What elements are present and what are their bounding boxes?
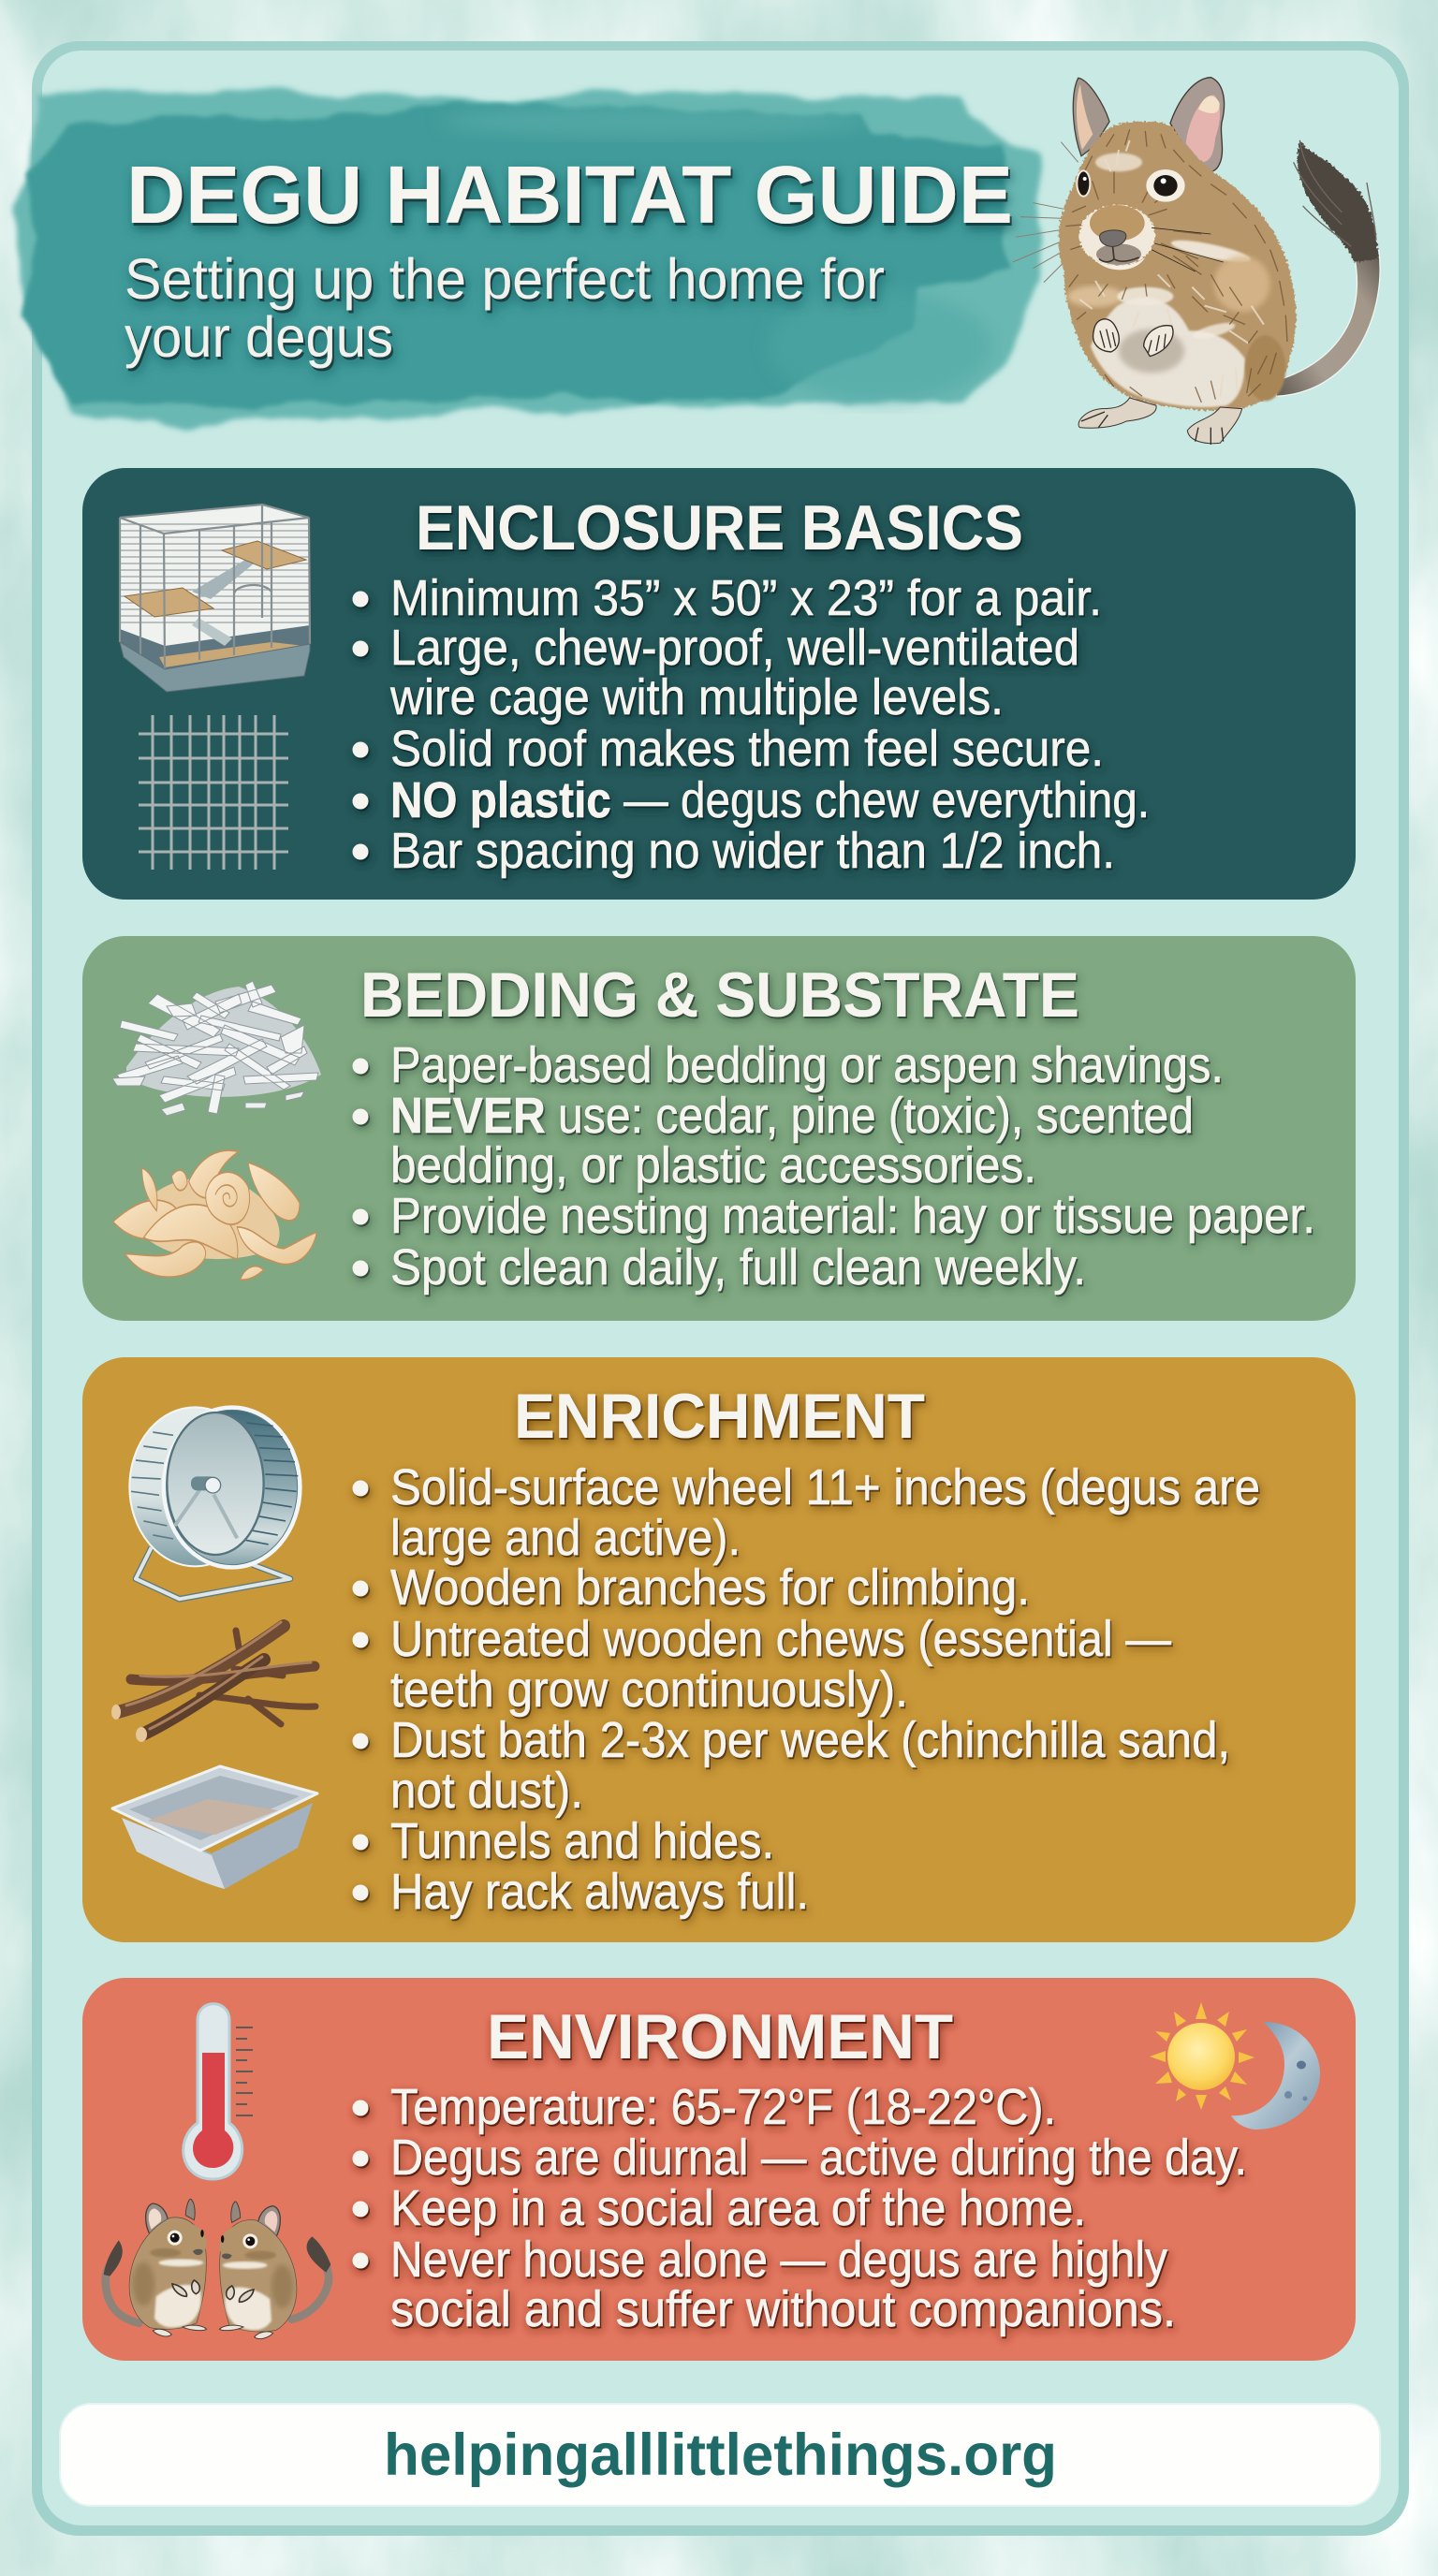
bullet list: environment	[352, 2079, 1247, 2337]
bullet list: enrichment: Dust bath 2-3x per week (chinchilla sand,	[390, 1712, 1230, 1768]
body fur	[1059, 121, 1296, 410]
tail	[1276, 250, 1380, 396]
bullet list: enrichment: not dust).	[390, 1763, 583, 1819]
bullet list: environment: Never house alone — degus are highly	[390, 2232, 1167, 2288]
icon: two degus	[104, 2199, 330, 2339]
ears	[1073, 78, 1109, 156]
icon: thermometer	[183, 2004, 253, 2179]
bullet list: enclosure: Bar spacing no wider than 1/2 inch.	[390, 823, 1115, 879]
light fur strokes	[1079, 140, 1264, 396]
icon: exercise wheel	[129, 1407, 300, 1599]
bullet list: enrichment: Solid-surface wheel 11+ inches (degus are	[390, 1459, 1260, 1515]
bullet list: enrichment: large and active).	[390, 1510, 741, 1566]
panel: enclosure basics	[82, 468, 1356, 900]
bullet list: enclosure: NO plastic — degus chew everything.	[390, 772, 1150, 828]
icon: wire grid	[139, 715, 288, 870]
bullet list: enclosure	[352, 570, 1150, 879]
icon: wire cage	[120, 505, 310, 692]
eyes	[1077, 170, 1090, 197]
bullet list: bedding	[352, 1037, 1315, 1295]
panel: environment	[82, 1978, 1356, 2361]
bullet list: bedding: Paper-based bedding or aspen shavings.	[390, 1037, 1224, 1093]
degu left	[104, 2199, 207, 2336]
bullet list: environment: social and suffer without companions.	[390, 2281, 1176, 2337]
bullet list: bedding: NEVER use: cedar, pine (toxic), scented	[390, 1088, 1194, 1144]
bullet list: enrichment: Untreated wooden chews (essential —	[390, 1611, 1171, 1667]
bullet list: enrichment: Tunnels and hides.	[390, 1813, 774, 1869]
icon: wood shavings	[113, 1150, 316, 1280]
icon: dust bath tray	[112, 1766, 317, 1889]
bullet list: environment: Keep in a social area of the home.	[390, 2180, 1086, 2236]
heading: enrichment: ENRICHMENT	[514, 1381, 925, 1452]
dark fur strokes	[1065, 129, 1287, 402]
icon: shredded paper	[112, 981, 321, 1116]
illustration: watercolor degu	[1013, 78, 1380, 445]
icon: wooden sticks	[111, 1622, 315, 1742]
bullet list: enclosure: wire cage with multiple levels.	[389, 669, 1004, 725]
bullet list: enrichment	[352, 1459, 1260, 1920]
degu right	[219, 2202, 330, 2339]
footer bar	[60, 2404, 1380, 2506]
subtitle: your degus	[125, 305, 393, 369]
icon: sun	[1150, 2002, 1255, 2110]
panel: bedding and substrate	[82, 936, 1356, 1321]
icon: crescent moon	[1231, 2022, 1320, 2130]
subtitle: Setting up the perfect home for	[125, 247, 885, 311]
bullet list: bedding: bedding, or plastic accessories.	[390, 1137, 1036, 1193]
header banner	[14, 92, 1041, 431]
bullet list: enrichment: Wooden branches for climbing.	[390, 1559, 1030, 1616]
bullet list: bedding: Spot clean daily, full clean weekly.	[390, 1239, 1086, 1295]
panel: enrichment	[82, 1357, 1356, 1942]
paws and feet	[1093, 319, 1119, 352]
watercolor brush banner	[14, 92, 1041, 431]
heading: bedding and substrate: BEDDING & SUBSTRATE	[360, 959, 1079, 1031]
bullet list: enclosure: Large, chew-proof, well-ventilated	[390, 620, 1079, 676]
muzzle	[1079, 205, 1155, 266]
subtitle	[125, 247, 885, 369]
title: DEGU HABITAT GUIDE	[126, 150, 1013, 241]
heading: environment: ENVIRONMENT	[487, 2001, 953, 2072]
website url: helpingalllittlethings.org	[384, 2422, 1057, 2488]
belly	[1091, 298, 1245, 407]
whiskers right	[1152, 227, 1224, 271]
bullet list: enclosure: Minimum 35” x 50” x 23” for a pair.	[390, 570, 1102, 626]
whiskers left	[1013, 142, 1078, 283]
bullet list: environment: Temperature: 65-72°F (18-22°C).	[390, 2079, 1056, 2135]
bullet list: environment: Degus are diurnal — active during the day.	[390, 2130, 1247, 2186]
bullet list: enclosure: Solid roof makes them feel secure.	[390, 721, 1104, 777]
bullet list: enrichment: teeth grow continuously).	[390, 1661, 908, 1718]
bullet list: enrichment: Hay rack always full.	[390, 1864, 809, 1920]
heading: enclosure basics: ENCLOSURE BASICS	[416, 492, 1023, 564]
bullet list: bedding: Provide nesting material: hay or tissue paper.	[390, 1188, 1315, 1244]
